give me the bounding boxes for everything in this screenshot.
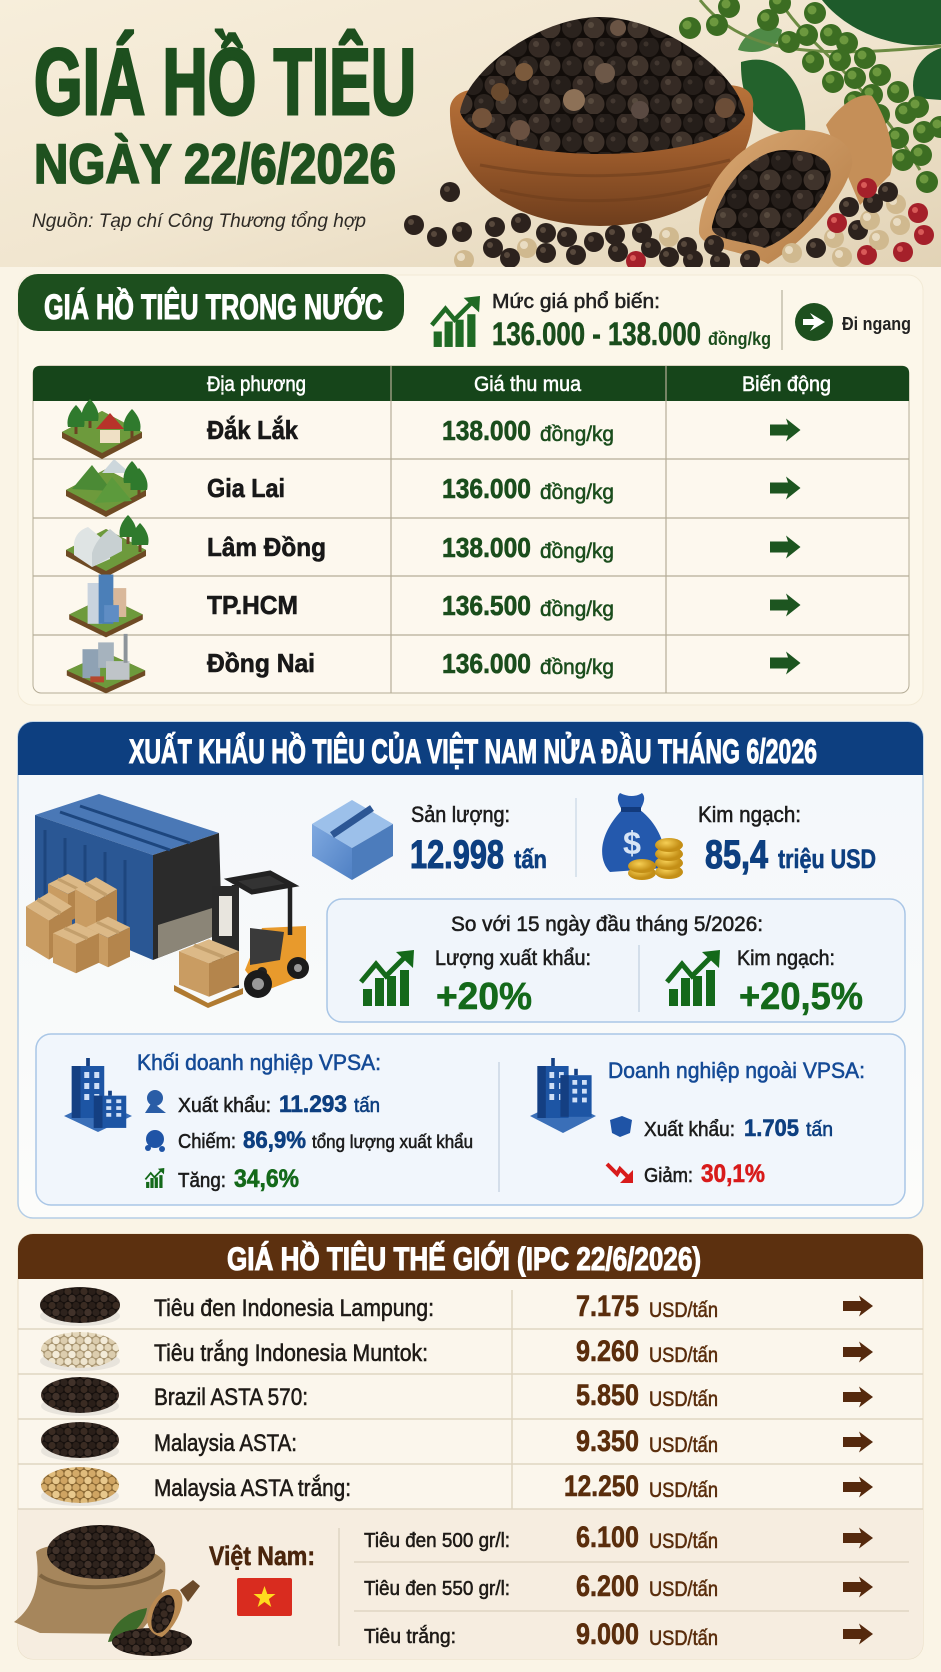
table: domestic prices bbox=[33, 366, 909, 693]
row: black 500 bbox=[364, 1521, 873, 1554]
panel: domestic prices bbox=[18, 274, 923, 705]
row: Lâm Đồng bbox=[66, 515, 800, 577]
row: Malaysia ASTA: USD/tấn bbox=[649, 1434, 718, 1457]
common price: đồng/kg bbox=[708, 329, 771, 349]
icon: parcel bbox=[610, 1116, 632, 1137]
stat: exports bbox=[644, 1115, 833, 1142]
row: black 500: Tiêu đen 500 gr/l: bbox=[364, 1530, 510, 1552]
table header: Biến động bbox=[742, 373, 831, 396]
stat: exports: tấn bbox=[354, 1095, 380, 1117]
row: Lâm Đồng: 138.000 bbox=[442, 532, 531, 563]
row: TP.HCM: TP.HCM bbox=[207, 590, 298, 620]
stat: share: tổng lượng xuất khẩu bbox=[312, 1132, 473, 1152]
row: Malaysia white bbox=[41, 1467, 873, 1506]
icon: black pepper dish bbox=[41, 1377, 119, 1416]
panel: world prices bbox=[14, 1234, 923, 1659]
stat: volume: Sản lượng: bbox=[411, 802, 510, 827]
stat: exports: Xuất khẩu: bbox=[644, 1119, 735, 1141]
stat: exports: tấn bbox=[806, 1119, 833, 1141]
row: Đồng Nai bbox=[67, 634, 801, 693]
trend: sideways bbox=[795, 303, 911, 341]
icon: building block bbox=[530, 1058, 596, 1133]
icon: tan pepper dish bbox=[41, 1467, 119, 1506]
trend: sideways: Đi ngang bbox=[842, 314, 911, 334]
stat: share: Chiếm: bbox=[178, 1131, 236, 1153]
row: Malaysia white: USD/tấn bbox=[649, 1479, 718, 1502]
icon: greenhouses bbox=[66, 515, 149, 577]
row: black 550: Tiêu đen 550 gr/l: bbox=[364, 1578, 510, 1600]
row: white: Tiêu trắng: bbox=[364, 1625, 456, 1648]
table header bbox=[33, 366, 909, 401]
heading: outside VPSA: Doanh nghiệp ngoài VPSA: bbox=[608, 1058, 865, 1083]
row: Gia Lai bbox=[66, 459, 800, 517]
table header: Địa phương bbox=[207, 373, 306, 396]
VPSA box bbox=[36, 1034, 905, 1205]
icon: falling arrow bbox=[607, 1164, 633, 1183]
icon: pie share bbox=[145, 1130, 165, 1152]
icon: black pepper dish bbox=[41, 1422, 119, 1461]
row: Muntok: USD/tấn bbox=[649, 1344, 718, 1367]
stat: increase: Tăng: bbox=[178, 1170, 226, 1192]
icon: farm house bbox=[62, 399, 142, 459]
common price bbox=[492, 291, 771, 352]
row: Lâm Đồng: Lâm Đồng bbox=[207, 532, 326, 562]
table header: Giá thu mua bbox=[474, 373, 581, 396]
stat: volume change bbox=[435, 947, 591, 1018]
header banner with pepper photo bbox=[0, 0, 941, 277]
source: Nguồn: Tạp chí Công Thương tổng hợp bbox=[32, 211, 366, 232]
stat: value change: +20,5% bbox=[739, 976, 863, 1018]
icon: city towers bbox=[69, 574, 143, 637]
stat: volume change: +20% bbox=[436, 976, 532, 1018]
row: Brazil: USD/tấn bbox=[649, 1388, 718, 1411]
row: Đồng Nai: 136.000 bbox=[442, 648, 531, 679]
comparison box: So với 15 ngày đầu tháng 5/2026: bbox=[451, 913, 763, 936]
row: black 500: USD/tấn bbox=[649, 1530, 718, 1553]
stat: decrease: 30,1% bbox=[701, 1160, 765, 1188]
icon: rising chart bbox=[361, 950, 414, 1006]
row: Đồng Nai: Đồng Nai bbox=[207, 648, 315, 678]
stat: exports: Xuất khẩu: bbox=[178, 1095, 271, 1117]
stat: volume bbox=[410, 802, 547, 877]
row: black 550 bbox=[364, 1570, 873, 1603]
row: Đồng Nai: đồng/kg bbox=[540, 656, 614, 679]
row: Muntok: 9.260 bbox=[576, 1335, 639, 1368]
stat: volume: 12.998 bbox=[410, 833, 504, 877]
illustration: pepper bowl, scoop and vine bbox=[0, 0, 941, 277]
row: Lampung: USD/tấn bbox=[649, 1299, 718, 1322]
row: Malaysia white: Malaysia ASTA trắng: bbox=[154, 1475, 351, 1502]
row: Lampung: Tiêu đen Indonesia Lampung: bbox=[154, 1295, 434, 1322]
heading pill: domestic: GIÁ HỒ TIÊU TRONG NƯỚC bbox=[44, 287, 383, 327]
Vietnam section background bbox=[18, 1509, 923, 1659]
row: Muntok: Tiêu trắng Indonesia Muntok: bbox=[154, 1340, 428, 1367]
row: TP.HCM: 136.500 bbox=[442, 590, 531, 621]
row: black 550: 6.200 bbox=[576, 1570, 639, 1603]
row: Gia Lai: đồng/kg bbox=[540, 481, 614, 504]
comparison box bbox=[327, 899, 905, 1022]
row: Muntok bbox=[40, 1332, 873, 1371]
row: TP.HCM bbox=[69, 574, 800, 637]
icon: rising chart bbox=[667, 950, 720, 1006]
cardboard boxes bbox=[26, 874, 130, 973]
icon: hills bbox=[66, 459, 148, 517]
stat: decrease bbox=[644, 1160, 765, 1188]
row: Gia Lai: 136.000 bbox=[442, 473, 531, 504]
stat: exports: 1.705 bbox=[744, 1115, 799, 1142]
icon: parcel bbox=[312, 800, 393, 880]
row: Malaysia ASTA: Malaysia ASTA: bbox=[154, 1430, 297, 1457]
row: white bbox=[364, 1618, 873, 1651]
heading: world prices: GIÁ HỒ TIÊU THẾ GIỚI (IPC 22/6/2026) bbox=[227, 1241, 701, 1277]
stat: volume change: Lượng xuất khẩu: bbox=[435, 947, 591, 970]
stat: exports bbox=[178, 1091, 380, 1118]
icon: factory bbox=[67, 634, 145, 693]
icon: rising chart bbox=[432, 296, 480, 347]
row: white: USD/tấn bbox=[649, 1627, 718, 1650]
heading: VPSA members: Khối doanh nghiệp VPSA: bbox=[137, 1050, 381, 1075]
forklift bbox=[174, 873, 309, 1008]
row: Malaysia ASTA bbox=[41, 1422, 873, 1461]
row: Đắk Lắk: 138.000 bbox=[442, 415, 531, 446]
stat: share: 86,9% bbox=[243, 1127, 306, 1154]
stat: value: 85,4 bbox=[705, 833, 769, 877]
stat: increase: 34,6% bbox=[234, 1165, 299, 1193]
stat: value change bbox=[737, 947, 863, 1018]
heading: exports bbox=[18, 722, 923, 775]
illustration: container and forklift bbox=[26, 794, 309, 1008]
icon: black pepper dish bbox=[40, 1287, 120, 1326]
heading pill: domestic bbox=[18, 274, 404, 331]
row: Gia Lai: Gia Lai bbox=[207, 473, 285, 503]
stat: share bbox=[178, 1127, 473, 1154]
row: white: 9.000 bbox=[576, 1618, 639, 1651]
stat: value: Kim ngạch: bbox=[698, 802, 801, 827]
stat: volume: tấn bbox=[514, 844, 547, 874]
row: Brazil: 5.850 bbox=[576, 1379, 639, 1412]
stat: decrease: Giảm: bbox=[644, 1165, 693, 1187]
row: TP.HCM: đồng/kg bbox=[540, 598, 614, 621]
row: Malaysia ASTA: 9.350 bbox=[576, 1425, 639, 1458]
stat: increase bbox=[178, 1165, 299, 1193]
illustration: pepper sack bbox=[14, 1525, 200, 1656]
stat: exports: 11.293 bbox=[279, 1091, 347, 1118]
row: black 500: 6.100 bbox=[576, 1521, 639, 1554]
icon: money bag: $ bbox=[623, 825, 641, 861]
icon: small rising chart bbox=[145, 1168, 164, 1188]
common price: 136.000 - 138.000 bbox=[492, 316, 701, 352]
icon: parcel bbox=[145, 1090, 166, 1113]
icon: Vietnam flag bbox=[237, 1578, 292, 1616]
row: Brazil bbox=[41, 1377, 873, 1416]
row: Malaysia white: 12.250 bbox=[564, 1470, 639, 1503]
common price: Mức giá phổ biến: bbox=[492, 291, 660, 313]
stat: value: triệu USD bbox=[778, 844, 876, 874]
title: GIÁ HỒ TIÊU bbox=[34, 29, 416, 134]
row: Lampung: 7.175 bbox=[576, 1290, 639, 1323]
row: Brazil: Brazil ASTA 570: bbox=[154, 1384, 308, 1411]
subtitle date: NGÀY 22/6/2026 bbox=[34, 132, 396, 195]
icon: buildings bbox=[64, 1058, 132, 1132]
row: Lâm Đồng: đồng/kg bbox=[540, 540, 614, 563]
row: black 550: USD/tấn bbox=[649, 1578, 718, 1601]
icon: money bag bbox=[602, 793, 683, 880]
icon: white pepper dish bbox=[40, 1332, 120, 1371]
row: Lampung bbox=[40, 1287, 873, 1326]
heading: world prices bbox=[18, 1234, 923, 1279]
stat: value change: Kim ngạch: bbox=[737, 947, 835, 970]
stat: value bbox=[698, 802, 876, 877]
row: Đắk Lắk: đồng/kg bbox=[540, 423, 614, 446]
label: Vietnam: Việt Nam: bbox=[209, 1541, 315, 1571]
row: Đắk Lắk bbox=[62, 399, 800, 459]
row: Đắk Lắk: Đắk Lắk bbox=[207, 415, 298, 445]
panel: exports bbox=[18, 722, 923, 1218]
